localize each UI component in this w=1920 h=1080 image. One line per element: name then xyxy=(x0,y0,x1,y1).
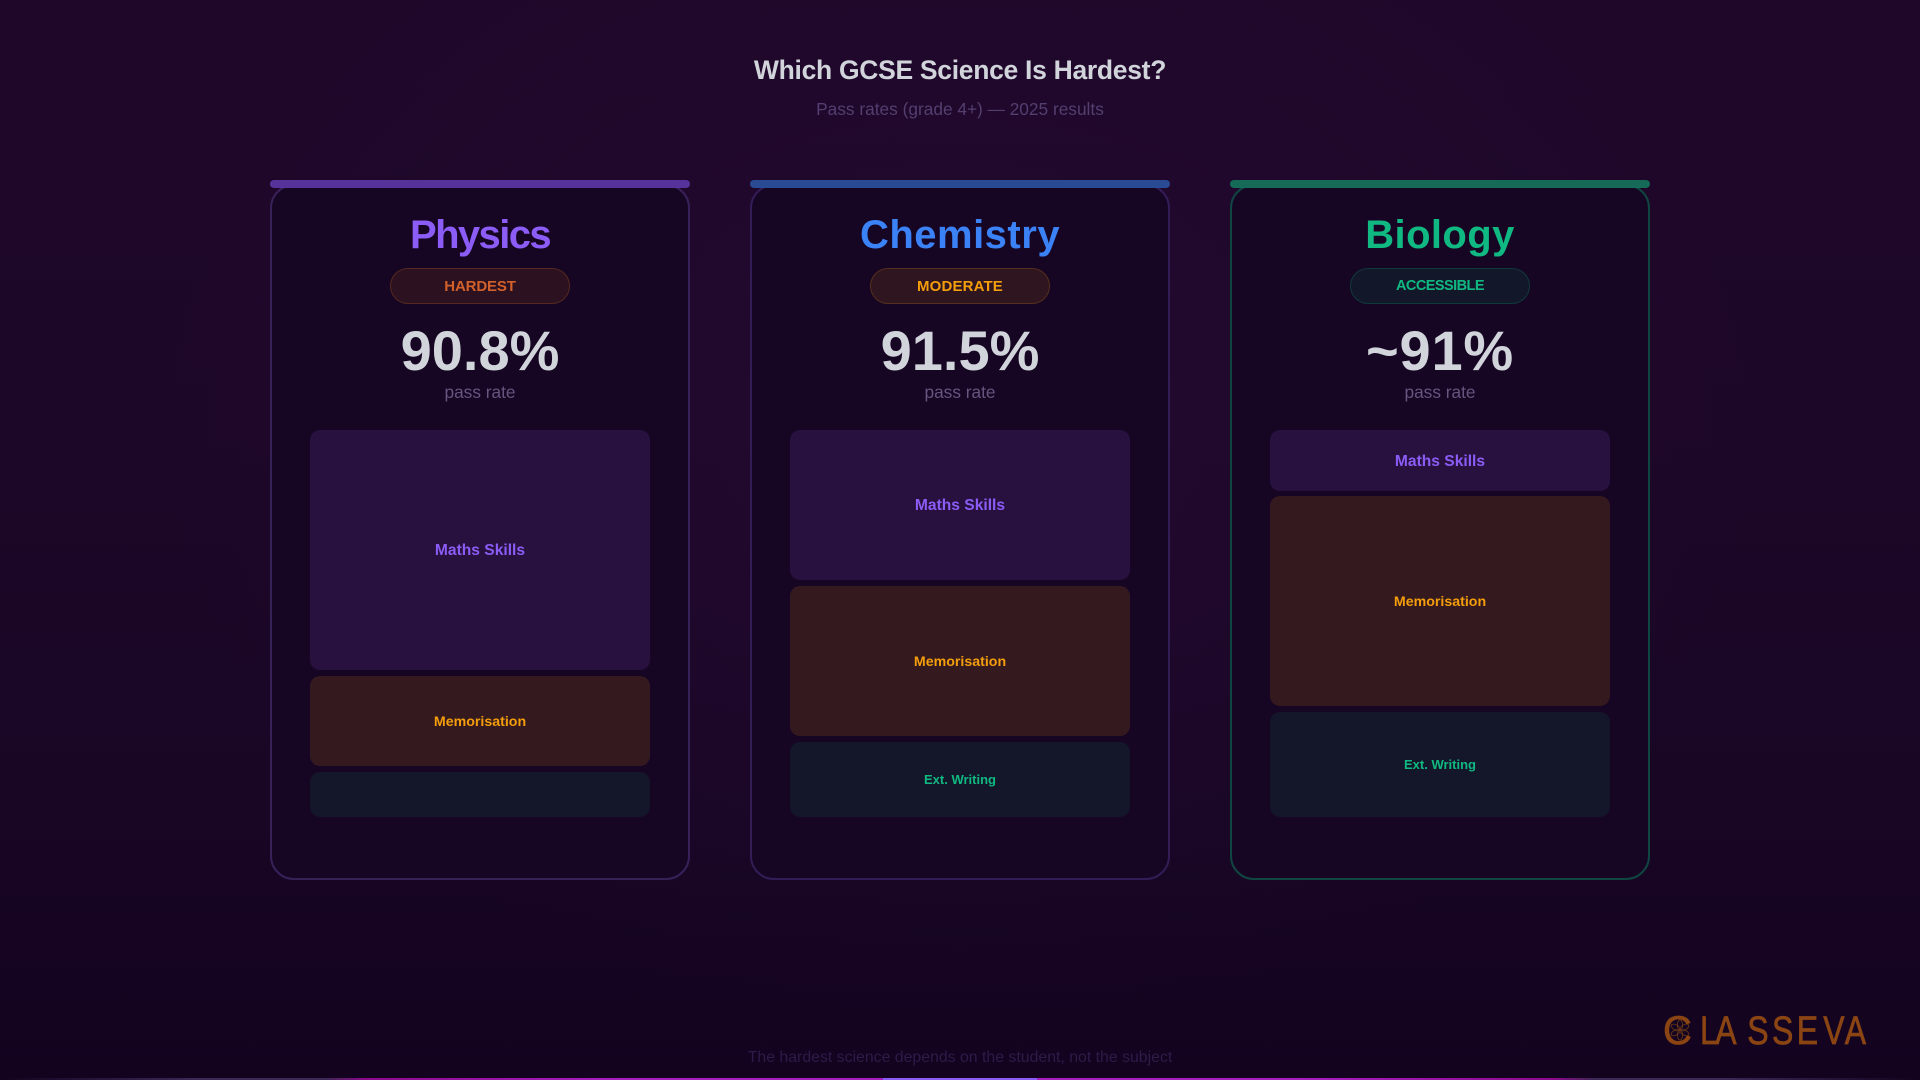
badge: moderate: MODERATE xyxy=(917,278,1003,295)
panel: Chemistry xyxy=(750,180,1170,880)
top accent bar xyxy=(270,180,690,188)
subject heading: Chemistry xyxy=(860,213,1060,257)
block: maths skills xyxy=(790,430,1130,580)
badge: accessible xyxy=(1350,268,1530,304)
pass rate number: 90.8% xyxy=(401,319,559,382)
pass rate caption: pass rate xyxy=(1404,382,1476,402)
block: extended writing: Ext. Writing xyxy=(1404,757,1476,772)
pass rate caption: pass rate xyxy=(924,382,996,402)
block: memorisation xyxy=(310,676,650,766)
top accent bar xyxy=(750,180,1170,188)
card body xyxy=(270,184,690,880)
bottom gradient bar xyxy=(0,1078,1920,1080)
pass rate caption: pass rate xyxy=(444,382,516,402)
block: extended writing xyxy=(1270,712,1610,817)
block: maths skills xyxy=(1270,430,1610,491)
badge: moderate xyxy=(870,268,1050,304)
logo wordmark: C xyxy=(1663,1009,1692,1053)
logo flower icon xyxy=(1670,1020,1690,1040)
block: memorisation: Memorisation xyxy=(434,714,526,730)
top accent bar xyxy=(1230,180,1650,188)
block: extended writing xyxy=(790,742,1130,817)
badge: hardest xyxy=(390,268,570,304)
pass rate number: ~91% xyxy=(1366,319,1514,382)
footer note: The hardest science depends on the student, not the subject xyxy=(748,1049,1172,1066)
block: maths skills: Maths Skills xyxy=(915,497,1005,514)
block: memorisation xyxy=(790,586,1130,736)
subtitle: Pass rates (grade 4+) — 2025 results xyxy=(816,99,1104,119)
block: maths skills xyxy=(310,430,650,670)
card body xyxy=(1230,184,1650,880)
block: extended writing: Ext. Writing xyxy=(924,772,996,787)
block: maths skills: Maths Skills xyxy=(435,542,525,559)
block: memorisation xyxy=(1270,496,1610,706)
badge: hardest: HARDEST xyxy=(444,278,516,295)
block: memorisation: Memorisation xyxy=(1394,594,1486,610)
block: memorisation: Memorisation xyxy=(914,654,1006,670)
card body xyxy=(750,184,1170,880)
panel: Biology xyxy=(1230,180,1650,880)
panel: Physics xyxy=(270,180,690,880)
badge: accessible: ACCESSIBLE xyxy=(1396,278,1484,294)
title: Which GCSE Science Is Hardest? xyxy=(754,55,1166,85)
logo wordmark: LASSEVA xyxy=(1700,1008,1867,1053)
logo: Classeva xyxy=(1663,1008,1867,1053)
subject heading: Physics xyxy=(410,213,550,257)
pass rate number: 91.5% xyxy=(881,319,1039,382)
subject heading: Biology xyxy=(1365,213,1515,257)
block: maths skills: Maths Skills xyxy=(1395,452,1485,470)
block: extended writing (no label) xyxy=(310,772,650,817)
